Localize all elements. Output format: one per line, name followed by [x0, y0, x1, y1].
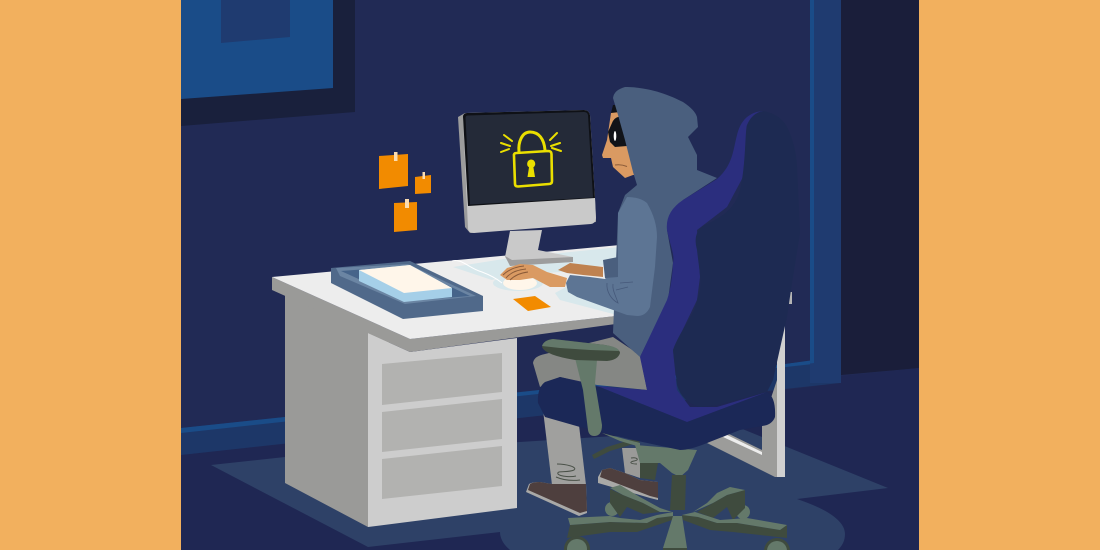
- chair: [538, 111, 800, 550]
- desk pedestal side: [285, 290, 410, 527]
- armrest: [542, 339, 620, 436]
- chair back: [673, 111, 800, 407]
- chair base column: [592, 433, 697, 510]
- far shoe: [598, 468, 658, 500]
- star base: [567, 485, 787, 550]
- baseboard and door frame: [181, 0, 841, 455]
- armrest post: [575, 358, 602, 436]
- near shoe: [526, 482, 587, 516]
- near hand: [500, 264, 567, 287]
- gas lift lever: [592, 438, 640, 459]
- far lower leg: [622, 448, 640, 478]
- thigh: [533, 337, 647, 390]
- sleeve: [566, 197, 657, 316]
- face: [602, 105, 640, 178]
- blue trim: [560, 111, 767, 422]
- keyboard mat and desk shadows: [453, 247, 625, 315]
- casters front: [564, 536, 590, 550]
- desk right leg: [707, 292, 792, 477]
- room background: [181, 0, 919, 550]
- sticky notes on wall: [379, 152, 431, 232]
- seat cushion: [538, 377, 775, 450]
- trouser creases: [556, 458, 637, 480]
- far hand: [558, 263, 603, 277]
- drawers: [382, 353, 502, 499]
- mouth: [615, 165, 627, 166]
- rug: [211, 428, 888, 550]
- padlock icon: [501, 132, 561, 186]
- desk edge: [272, 277, 625, 352]
- keyhole: [527, 160, 535, 177]
- armrest pad: [542, 339, 620, 361]
- torso and hood: [613, 87, 717, 357]
- mouse: [503, 276, 537, 290]
- document tray: [331, 261, 483, 319]
- screen: [463, 110, 595, 206]
- eye mask: [608, 105, 627, 147]
- sleeve folds: [607, 282, 633, 303]
- monitor stand: [505, 230, 573, 266]
- monitor: [458, 110, 596, 233]
- desk: [272, 245, 640, 527]
- orange note on desk: [513, 296, 551, 311]
- paper stack: [359, 265, 452, 302]
- near lower leg: [543, 410, 586, 485]
- hacker: [500, 87, 717, 516]
- desk pedestal front: [368, 333, 517, 527]
- casters rear: [605, 502, 619, 516]
- wall picture frame: [181, 0, 355, 126]
- sleeve cuff shade: [603, 257, 618, 278]
- mouse cable: [452, 260, 502, 283]
- eye: [614, 131, 616, 141]
- desk top: [272, 245, 640, 339]
